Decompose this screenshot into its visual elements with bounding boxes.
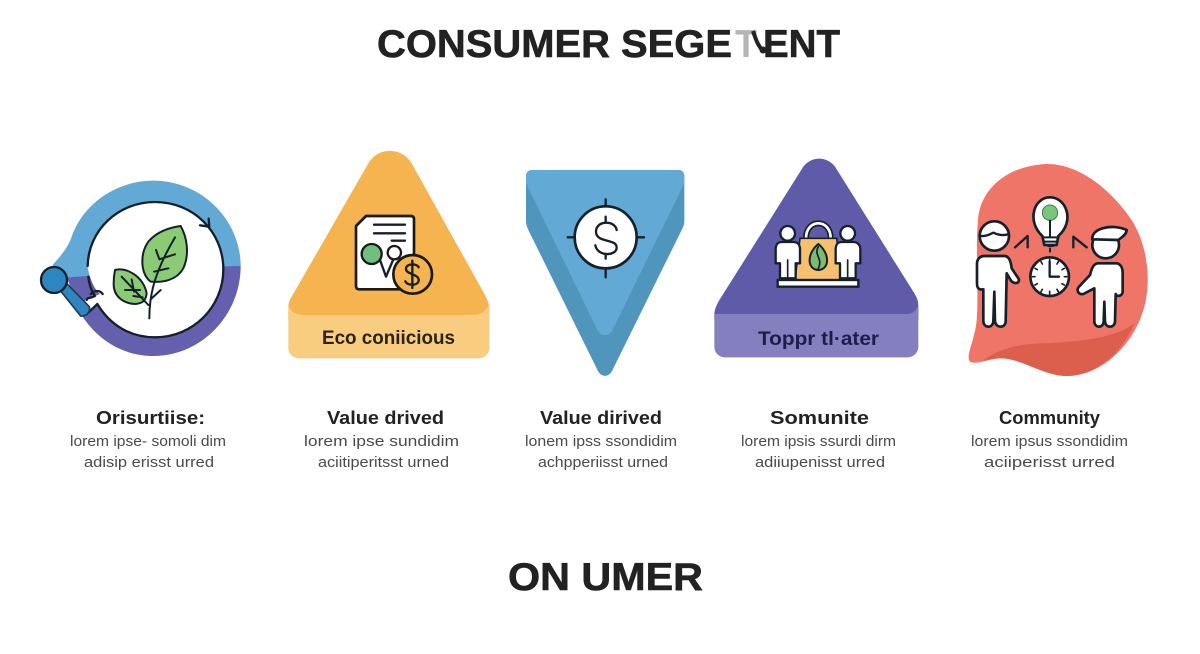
icon: right person [1078,227,1127,327]
footer heading: ON UMER [508,556,703,599]
caption: segment 3 [525,408,677,471]
icon: people with shopping bag [776,223,860,287]
label band [714,305,918,357]
caption: segment 2 [304,408,459,471]
caption: segment 4: lorem ipsis ssurdi dirm [741,433,896,450]
panel: segment 2 yellow triangle [288,151,489,358]
caption: segment 5: aciiperisst urred [984,454,1115,471]
icon: lightbulb [1033,197,1067,252]
title: T [735,23,757,66]
triangle body [288,151,489,318]
caption: segment 2: Value drived [327,408,444,428]
caption: segment 2: aciitiperitsst urned [318,454,449,471]
caption: segment 1: Orisurtiise: [96,408,205,428]
icon: document with coin [356,216,432,294]
icon: white inner circle [85,202,223,337]
panel: segment 4 purple triangle [714,159,918,357]
caption: segment 5: lorem ipsus ssondidim [971,433,1128,450]
band text: Toppr tl-ater: Toppr tl·ater [758,329,880,350]
triangle body [714,159,918,320]
caption: segment 3: achpperiisst urned [538,454,668,471]
caption: segment 3: lonem ipss ssondidim [525,433,677,450]
caption: segment 1: lorem ipse- somoli dim [70,433,226,450]
panel: segment 5 coral blob [969,164,1148,376]
icon: blue handle [41,267,90,316]
blob shadow [983,323,1134,376]
caption: segment 5 [971,408,1128,471]
icon: leaves [114,226,187,318]
caption: segment 4 [741,408,896,471]
icon: dollar target [568,199,644,277]
caption: segment 5: Community [999,408,1100,428]
icon: left person [977,221,1019,327]
panel: segment 1 ring icon [41,181,241,356]
icon: ring outline and arrow [87,202,223,337]
title: ENT [763,23,840,66]
caption: segment 2: lorem ipse sundidim [304,433,459,450]
icon: connector arrows [1015,236,1087,247]
triangle face light [526,170,684,335]
icon: clock [1030,257,1069,296]
caption: segment 3: Value dirived [540,408,662,428]
panel: segment 3 blue inverted triangle [526,170,684,376]
caption: segment 1 [70,408,226,471]
blob body [969,164,1148,376]
caption: segment 1: adisip erisst urred [84,454,214,471]
caption: segment 4: adiiupenisst urred [755,454,885,471]
triangle body dark [526,170,684,376]
icon: blue and purple ring [47,181,241,356]
title: CONSUMER SEGE [377,23,732,66]
band text: Eco coniicious: Eco coniicious [322,328,455,349]
caption: segment 4: Somunite [770,408,869,428]
label band [288,303,489,358]
